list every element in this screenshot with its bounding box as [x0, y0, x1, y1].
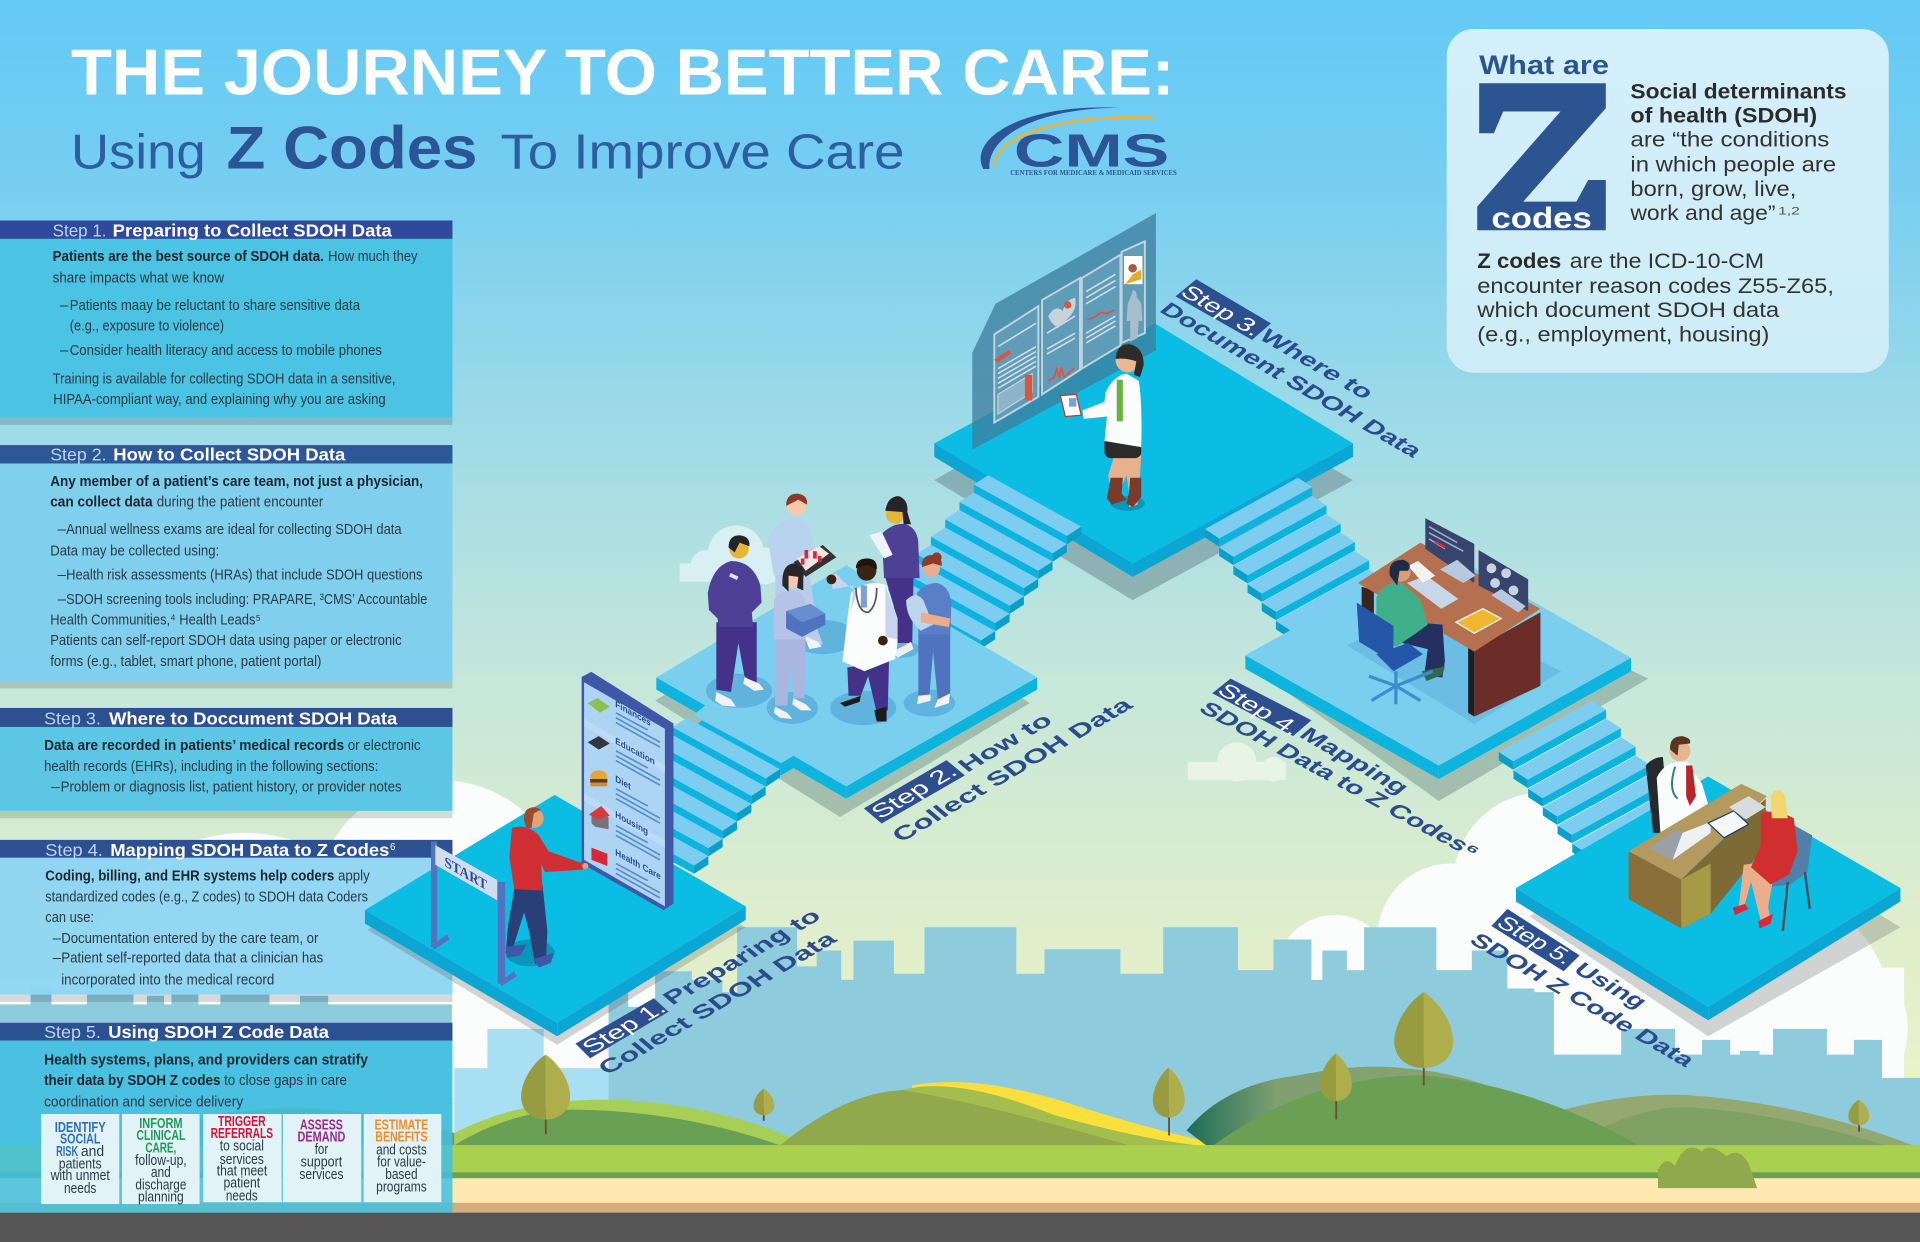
card: assess demand: ASSESS — [300, 1117, 343, 1133]
dashboard screen on step 3 — [972, 213, 1156, 450]
step 4 text: Patient self-reported data that a clinician has — [61, 950, 324, 967]
figure: phone with SDOH categories: Finances — [615, 699, 651, 728]
card: estimate benefits: ESTIMATE — [374, 1117, 428, 1133]
step 1 text: Training is available for collecting SDOH data in a sensitive, — [53, 370, 396, 387]
SDOH definition: Social determinants — [1630, 80, 1847, 103]
step 1 map label: Step 1. — [576, 997, 671, 1058]
panel: step 4 — [0, 840, 452, 1002]
step 4 map label — [1194, 679, 1486, 861]
step 3 heading: Where to Doccument SDOH Data — [109, 708, 398, 728]
CMS logo — [981, 107, 1177, 177]
step 5 heading: Step 5. — [44, 1022, 101, 1042]
step 4 map label: Mapping — [1294, 723, 1415, 798]
step 4 text: standardized codes (e.g., Z codes) to SDOH data Coders — [45, 888, 368, 905]
step 3 text: health records (EHRs), including in the following sections: — [44, 758, 378, 775]
platform: step 2 — [656, 565, 1037, 799]
platform: step 5 — [1516, 777, 1900, 1020]
SDOH definition: work and age” — [1629, 202, 1776, 225]
stairs: step 3 to step 4 — [1205, 478, 1383, 639]
white clouds right — [1276, 792, 1908, 1145]
bush — [1658, 1147, 1757, 1188]
step 5 heading: Using SDOH Z Code Data — [108, 1022, 330, 1042]
figure: clinician with clipboard — [1060, 344, 1145, 511]
icon: burger — [590, 770, 607, 786]
step 3 map label — [1155, 279, 1429, 462]
step 2 map label: How to — [952, 709, 1058, 776]
SDOH definition — [1629, 80, 1847, 225]
nurse with baby — [906, 552, 951, 708]
step 4 text: incorporated into the medical record — [61, 971, 274, 988]
icon: graduation cap — [588, 736, 610, 750]
platform: step 3 — [934, 323, 1353, 577]
step 3 map label: Document SDOH Data — [1155, 298, 1429, 462]
step 4 text: – — [53, 930, 62, 947]
card: assess demand: DEMAND — [298, 1130, 345, 1146]
step 5 map label — [1464, 909, 1702, 1071]
step 4 map label: Step 4. — [1212, 679, 1307, 739]
figure: START gate — [431, 841, 517, 986]
step 1 heading: Step 1. — [53, 220, 107, 240]
step 5 text: their data by SDOH Z codes — [44, 1072, 220, 1089]
figure: phone with SDOH categories: Education — [615, 735, 655, 767]
stairs: step 3 to step 2 — [888, 475, 1081, 649]
card: assess demand: services — [299, 1167, 343, 1183]
subtitle: Z Codes — [227, 114, 478, 181]
card: inform clinical care: CARE, — [145, 1141, 176, 1157]
step 1 text: Patients maay be reluctant to share sensitive data — [70, 297, 360, 314]
step 2 text: Health Communities,⁴ Health Leads⁵ — [50, 612, 261, 629]
step 1 text: – — [60, 342, 69, 359]
figure: care team — [706, 494, 955, 725]
step 4 text: Documentation entered by the care team, or — [61, 930, 318, 947]
card: inform clinical care: CLINICAL — [136, 1128, 185, 1144]
step 3 heading: Step 3. — [44, 708, 101, 728]
city skyline — [609, 927, 1920, 1164]
step 3 text: Problem or diagnosis list, patient history, or provider notes — [61, 779, 402, 796]
nurse with tray — [768, 494, 836, 649]
nurse with box — [774, 563, 825, 719]
card: inform clinical care: planning — [138, 1190, 184, 1206]
card: trigger referrals: patient — [223, 1176, 260, 1192]
panel: step 2 — [0, 445, 452, 688]
stairs: step 2 to step 1 — [601, 718, 780, 874]
card: assess demand — [283, 1114, 361, 1202]
card: estimate benefits: programs — [376, 1180, 427, 1196]
step 2 text: forms (e.g., tablet, smart phone, patient portal) — [50, 653, 321, 670]
Z codes definition: Z codes — [1477, 250, 1561, 273]
card: identify social risk — [41, 1114, 119, 1204]
step 5 text: Health systems, plans, and providers can stratify — [44, 1051, 368, 1068]
ground — [0, 1145, 1920, 1242]
Z codes definition — [1476, 250, 1834, 347]
step 3 text: – — [51, 779, 60, 796]
figure: phone with SDOH categories: Health Care — [615, 847, 661, 882]
step 4 text: can use: — [45, 909, 94, 926]
panel: step 1 — [0, 220, 452, 425]
step 5 text: coordination and service delivery — [44, 1094, 244, 1111]
figure: phone with SDOH categories: Housing — [615, 809, 648, 837]
step 1 text: share impacts what we know — [53, 269, 224, 286]
step 2 text: Any member of a patient’s care team, not just a physician, — [50, 473, 423, 490]
CMS logo: CENTERS FOR MEDICARE & MEDICAID SERVICES — [1010, 168, 1177, 177]
hills — [122, 1067, 1913, 1146]
step 4 text: – — [53, 950, 62, 967]
card: trigger referrals: to social — [220, 1139, 264, 1155]
CMS logo: CMS — [1014, 125, 1169, 177]
platform: step 4 — [1245, 548, 1631, 779]
step 1 text: Consider health literacy and access to mobile phones — [70, 342, 382, 359]
card: assess demand: for — [315, 1142, 328, 1158]
card: estimate benefits: BENEFITS — [375, 1130, 428, 1146]
figure: coder at desk — [1347, 518, 1561, 724]
step 1 heading: Preparing to Collect SDOH Data — [113, 220, 392, 240]
step 4 heading: 6 — [390, 842, 396, 853]
step 5 map label: Using — [1568, 958, 1653, 1013]
card: identify social risk: with unmet — [50, 1168, 110, 1184]
step 3 map label: Step 3. — [1175, 281, 1269, 340]
figure: phone with SDOH categories: Diet — [615, 773, 631, 792]
pale cloud right of step 4 — [1188, 742, 1286, 781]
purple nurse with clipboard — [869, 496, 920, 658]
card: identify social risk: needs — [64, 1181, 96, 1197]
step 2 text: Patients can self-report SDOH data using paper or electronic — [50, 632, 402, 649]
card: inform clinical care: follow-up, — [135, 1153, 187, 1169]
step 3 text: or electronic — [348, 737, 421, 754]
Z codes definition: (e.g., employment, housing) — [1477, 324, 1769, 347]
card: inform clinical care: and — [151, 1165, 171, 1181]
step 2 text: Annual wellness exams are ideal for collecting SDOH data — [66, 521, 402, 538]
subtitle — [71, 114, 905, 181]
SDOH definition: are “the conditions — [1630, 129, 1829, 152]
step 5 text — [44, 1051, 368, 1111]
card: identify social risk: SOCIAL — [60, 1131, 100, 1147]
label: codes: codes — [1491, 202, 1592, 235]
heading: what are: What are — [1479, 50, 1609, 80]
step 2 heading: Step 2. — [50, 445, 107, 465]
SDOH definition: born, grow, live, — [1630, 178, 1796, 201]
step 2 text — [50, 473, 427, 670]
step 4 heading: Step 4. — [45, 840, 103, 860]
card: estimate benefits — [364, 1114, 441, 1202]
card: identify social risk: RISK — [56, 1144, 78, 1160]
step 4 map label: SDOH Data to Z Codes⁶ — [1194, 697, 1486, 861]
left clinician in purple — [708, 535, 764, 707]
SDOH definition: of health (SDOH) — [1630, 104, 1817, 127]
step 4 text: apply — [338, 868, 370, 885]
step 2 text: – — [58, 521, 67, 538]
step 1 text: Patients are the best source of SDOH data. — [53, 248, 324, 265]
step 5 map label: Step 5. — [1491, 912, 1580, 968]
subtitle: Using — [71, 125, 206, 179]
icon: house — [589, 806, 610, 829]
card: identify social risk: IDENTIFY — [55, 1120, 106, 1136]
card: estimate benefits: and costs — [376, 1143, 427, 1159]
step 4 heading: Mapping SDOH Data to Z Codes — [110, 840, 389, 860]
figure: man pointing at phone — [506, 807, 588, 968]
city skyline far left — [0, 975, 452, 1164]
step 2 text: Data may be collected using: — [50, 543, 219, 560]
step 2 heading: How to Collect SDOH Data — [113, 445, 346, 465]
step 5 map label: SDOH Z Code Data — [1464, 929, 1702, 1071]
Z codes definition: encounter reason codes Z55-Z65, — [1477, 275, 1834, 298]
figure: phone with SDOH categories — [582, 672, 673, 910]
step 1 text: HIPAA-compliant way, and explaining why you are asking — [53, 391, 386, 408]
card: assess demand: support — [301, 1154, 342, 1170]
step 3 map label: Where to — [1254, 325, 1380, 403]
card: inform clinical care: discharge — [135, 1177, 186, 1193]
figure: doctor with patient at desk — [1629, 736, 1812, 931]
card: inform clinical care — [122, 1114, 200, 1206]
panel: step 3 — [0, 708, 452, 818]
title: THE JOURNEY TO BETTER CARE: — [71, 35, 1174, 108]
figure: START gate: START — [444, 854, 487, 895]
step 2 map label: Collect SDOH Data — [886, 693, 1139, 846]
card: estimate benefits: based — [385, 1167, 418, 1183]
icon: first aid kit — [591, 848, 607, 866]
icon: Z letter — [1477, 83, 1606, 230]
step 3 text: Data are recorded in patients’ medical records — [44, 737, 344, 754]
step 4 text: Coding, billing, and EHR systems help coders — [45, 868, 334, 885]
Z codes definition: are the ICD-10-CM — [1570, 250, 1764, 273]
step 3 text — [44, 737, 421, 796]
step 1 text: How much they — [328, 248, 418, 265]
step 1 text — [53, 248, 418, 408]
step 2 text: – — [58, 566, 67, 583]
icon: money — [588, 698, 610, 713]
trees — [521, 992, 1869, 1135]
card: trigger referrals: needs — [226, 1188, 258, 1204]
small pale cloud behind care team — [680, 525, 790, 584]
step 1 map label: Preparing to — [657, 905, 826, 1009]
panel: what are Z codes — [1447, 29, 1889, 373]
SDOH definition: in which people are — [1630, 153, 1836, 176]
step 2 text: – — [58, 591, 67, 608]
step 5 text: to close gaps in care — [224, 1072, 347, 1089]
shadows — [706, 620, 955, 725]
stairs: step 4 to step 5 — [1499, 701, 1680, 862]
SDOH definition: 1,2 — [1778, 205, 1800, 217]
white clouds left — [0, 780, 655, 1151]
Z codes definition: which document SDOH data — [1476, 299, 1780, 322]
step 1 map label: Collect SDOH Data — [592, 927, 843, 1079]
card: trigger referrals: REFERRALS — [211, 1126, 273, 1142]
step 2 text: can collect data — [50, 493, 153, 510]
step 1 map label — [576, 905, 843, 1079]
card: identify social risk: patients — [59, 1156, 102, 1172]
step 1 text: – — [60, 297, 69, 314]
step 2 map label — [864, 693, 1139, 846]
subtitle: To Improve Care — [500, 125, 905, 179]
panel: step 5 — [0, 1022, 452, 1213]
step 1 text: (e.g., exposure to violence) — [70, 318, 224, 335]
step 2 text: during the patient encounter — [157, 493, 323, 510]
card: trigger referrals: that meet — [217, 1164, 267, 1180]
card: identify social risk: and — [81, 1144, 104, 1160]
step 2 text: SDOH screening tools including: PRAPARE, ³CMS’ Accountable — [66, 591, 427, 608]
step 4 text — [45, 868, 370, 988]
doctor — [827, 559, 898, 721]
card: estimate benefits: for value- — [377, 1154, 426, 1170]
city skyline light block — [454, 1029, 610, 1164]
step 2 text: Health risk assessments (HRAs) that include SDOH questions — [66, 566, 423, 583]
platform shadows — [367, 360, 1900, 1045]
card: trigger referrals: services — [220, 1152, 264, 1168]
card: trigger referrals — [203, 1114, 282, 1204]
step 2 map label: Step 2. — [865, 761, 962, 823]
card: trigger referrals: TRIGGER — [218, 1114, 266, 1130]
card: inform clinical care: INFORM — [139, 1116, 183, 1132]
platform: step 1 — [365, 795, 746, 1036]
